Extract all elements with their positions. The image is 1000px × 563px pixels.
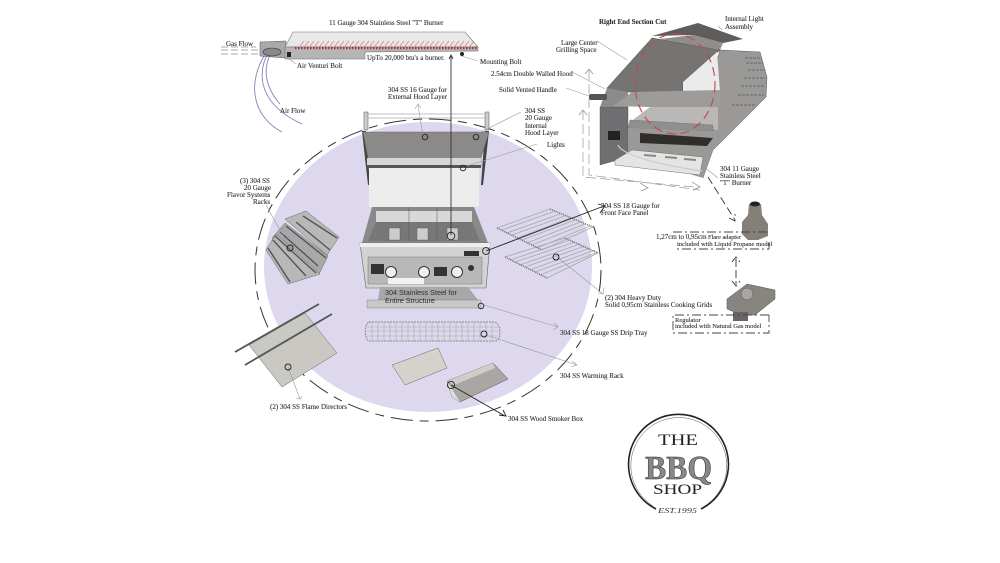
part labels: 20 Gauge	[525, 114, 552, 122]
flare adapter callout	[656, 232, 773, 249]
part labels: Internal	[525, 122, 547, 130]
main grill	[360, 112, 490, 308]
section labels	[491, 15, 764, 187]
section labels: Solid Vented Handle	[499, 86, 557, 94]
section labels: Internal Light	[725, 15, 764, 23]
part labels: Hood Layer	[525, 129, 559, 137]
section cut diagram	[579, 23, 767, 191]
section interior	[607, 38, 720, 92]
logo: The BBQ Shop: BBQ	[645, 450, 712, 487]
burner labels	[226, 19, 521, 115]
logo: The BBQ Shop: EST.1995	[657, 506, 697, 515]
flame director	[235, 304, 337, 387]
part labels: 304 SS 18 Gauge SS Drip Tray	[560, 329, 648, 337]
gas flow arrow	[221, 47, 258, 54]
part labels: Front Face Panel	[601, 209, 648, 217]
section right wall	[700, 50, 767, 178]
part labels: 304 SS 18 Gauge for	[601, 202, 660, 210]
burner venturi box	[260, 41, 286, 58]
burner labels: 11 Gauge 304 Stainless Steel "T" Burner	[329, 19, 444, 27]
part labels: Lights	[547, 141, 565, 149]
purple background ellipse	[264, 122, 592, 412]
section grid and middle	[613, 90, 720, 107]
regulator callout	[673, 315, 769, 333]
warming rack	[365, 322, 500, 341]
drip tray	[367, 287, 478, 300]
section labels: 304 11 Gauge	[720, 165, 759, 173]
drip tray text: 304 Stainless Steel for	[385, 288, 458, 297]
flare adapter callout: included with Liquid Propane model	[677, 241, 773, 248]
section left side	[600, 107, 628, 165]
logo: The BBQ Shop: THE	[658, 432, 698, 449]
flare adapter callout: 1,27cm to 0,95cm	[656, 233, 707, 241]
smoker box lid	[392, 348, 447, 385]
part labels: 20 Gauge	[244, 184, 271, 192]
dashed outer ellipse	[255, 119, 601, 421]
section labels: "T" Burner	[720, 179, 752, 187]
cooking grids	[497, 209, 598, 278]
section labels: Large Center	[561, 39, 598, 47]
logo: The BBQ Shop: SHOP	[653, 482, 702, 498]
section flow arrows	[583, 70, 700, 190]
part labels: Racks	[253, 198, 270, 206]
firebox	[362, 207, 488, 243]
burner labels: UpTo 20,000 btu's a burner.	[367, 54, 445, 62]
part labels: (3) 304 SS	[240, 177, 270, 185]
front panel	[360, 243, 490, 288]
burner labels: Gas Flow	[226, 40, 254, 48]
burner labels: Air Venturi Bolt	[297, 62, 342, 70]
hood inner panel	[369, 168, 479, 207]
hood frame	[364, 112, 489, 130]
part labels: 304 SS 16 Gauge for	[388, 86, 447, 94]
mounting bolts	[287, 52, 291, 57]
section handle	[589, 94, 607, 100]
burner labels: Mounting Bolt	[480, 58, 521, 66]
part labels: 304 SS Warming Rack	[560, 372, 624, 380]
regulator	[727, 284, 775, 321]
section labels: Grilling Space	[556, 46, 597, 54]
burner body	[285, 32, 478, 47]
section window	[683, 52, 720, 92]
section labels: 2.54cm Double Walled Hood	[491, 70, 573, 78]
part labels: 304 SS	[525, 107, 545, 115]
burner labels: Air Flow	[280, 107, 306, 115]
section roof	[652, 23, 743, 43]
part labels: (2) 304 Heavy Duty	[605, 294, 662, 302]
wood smoker box	[447, 363, 508, 402]
part labels: Flavor Systems	[227, 191, 271, 199]
part labels	[227, 86, 712, 423]
flare adapter callout: Flare adapter	[708, 234, 742, 241]
part labels: External Hood Layer	[388, 93, 448, 101]
section labels: Stainless Steel	[720, 172, 761, 180]
logo: The BBQ Shop	[628, 414, 728, 515]
air flow curves	[255, 53, 302, 132]
leader lines and callout circles	[266, 55, 740, 416]
section labels: Assembly	[725, 23, 754, 31]
part labels: (2) 304 SS Flame Directors	[270, 403, 347, 411]
burner flames	[300, 41, 474, 46]
burner diagram	[221, 32, 478, 132]
section labels: Right End Section Cut	[599, 18, 667, 26]
regulator callout: included with Natural Gas model	[675, 323, 761, 330]
main grill: Entire Structure	[385, 296, 435, 305]
regulator callout: Regulator	[675, 317, 701, 324]
section lower chamber	[628, 128, 713, 178]
igniter button	[468, 265, 474, 271]
part labels: Solid 0,95cm Stainless Cooking Grids	[605, 301, 712, 309]
part labels: 304 SS Wood Smoker Box	[508, 415, 584, 423]
flavor rack set	[266, 211, 339, 284]
hood lid	[363, 132, 489, 166]
flare adapter	[742, 202, 768, 240]
section red dashed circle	[635, 34, 715, 134]
control knobs	[386, 266, 462, 278]
